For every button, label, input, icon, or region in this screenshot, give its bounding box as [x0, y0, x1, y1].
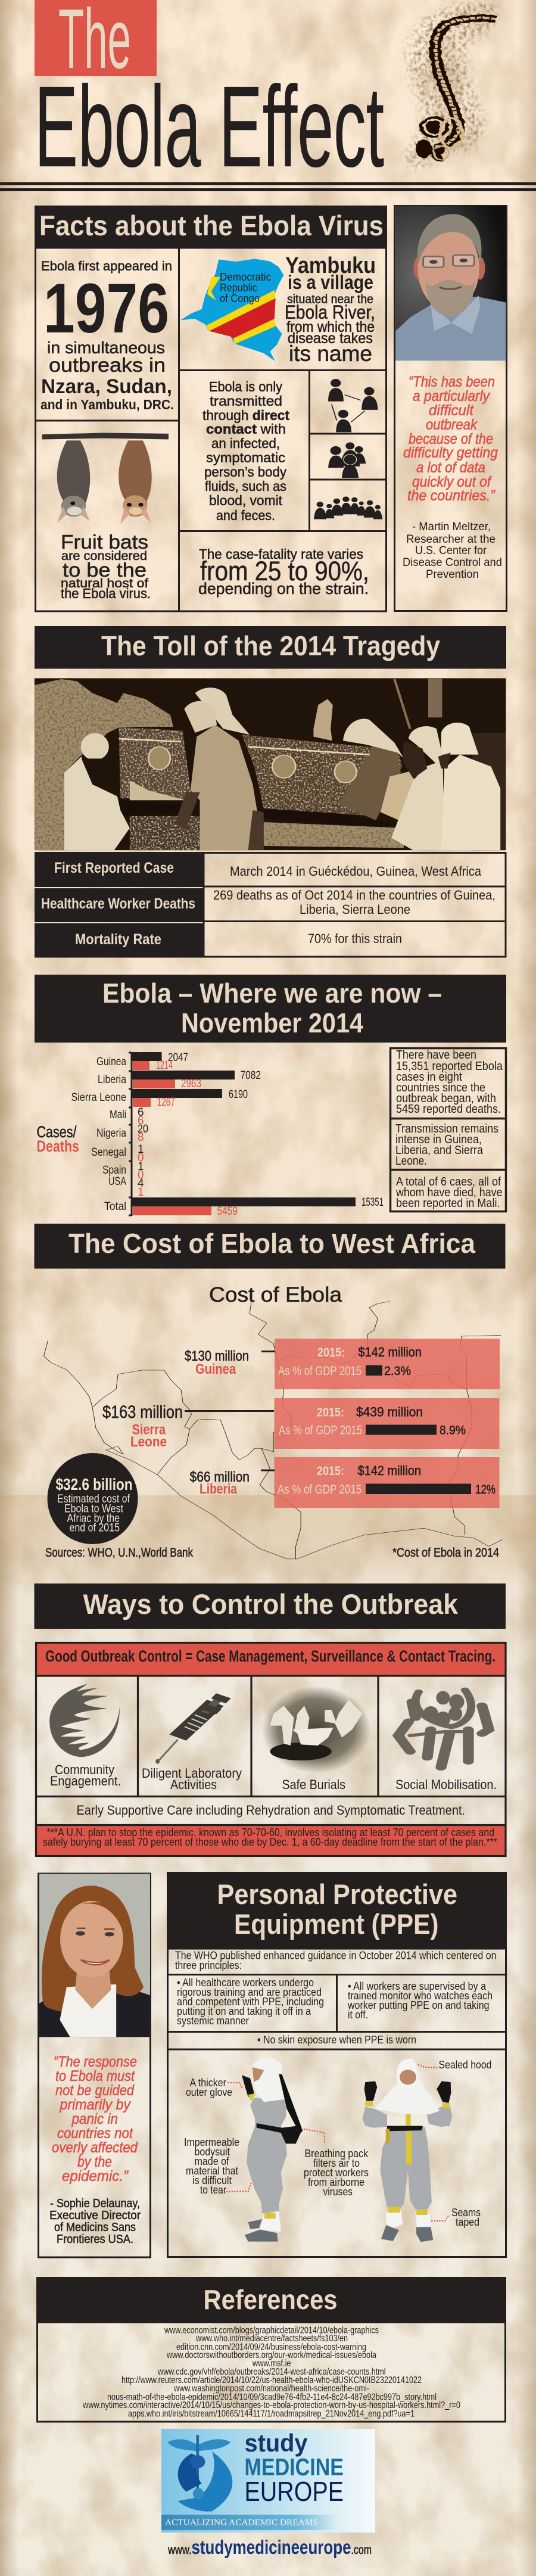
table: toll facts: March 2014 in Guéckédou, Guinea, West Africa [230, 864, 482, 879]
bar chart: cases and deaths by country: 4 [138, 1177, 144, 1190]
heading: ways to control the outbreak [35, 1583, 506, 1629]
bar chart: cases and deaths by country: 8 [138, 1131, 144, 1144]
callout: breathing pack: viruses [323, 2185, 353, 2198]
bar chart: cases and deaths by country: 1267 [157, 1096, 175, 1109]
icon: social mobilisation [395, 1690, 497, 1792]
table: toll facts: Liberia, Sierra Leone [300, 902, 410, 917]
quote text: the countries.” [407, 487, 496, 504]
quote text: countries not [57, 2125, 133, 2142]
panel: Sierra Leone cost: 2015: [317, 1406, 344, 1419]
callouts: outbreak notes: Transmission remains [395, 1122, 498, 1135]
map: West Africa outline [43, 1301, 503, 1559]
quote text: to Ebola must [55, 2068, 135, 2085]
icon: community engagement: Community [55, 1762, 114, 1777]
logo: Study Medicine Europe [161, 2429, 375, 2533]
photo: safe burials [261, 1686, 371, 1792]
text block: fruit bats: natural host of [61, 577, 148, 590]
text block: transmission: fluids, such as [205, 478, 286, 494]
quote text [403, 374, 498, 504]
legend: cases/deaths: Deaths [37, 1137, 79, 1155]
quote attribution: of Medicins Sans [54, 2221, 136, 2234]
title block [35, 0, 384, 191]
panel: Sierra Leone cost: As % of GDP 2015 [279, 1424, 362, 1437]
callout: breathing pack [302, 2129, 369, 2198]
text block: Yambuku: from which the [286, 319, 375, 335]
label: Sierra Leone 2014 cost: Leone [130, 1434, 167, 1450]
text: principle 2: • All workers are supervised by a [348, 1980, 487, 1992]
text block: fatality rate: depending on the strain. [198, 580, 369, 598]
quote text: difficult [429, 402, 474, 419]
heading: toll of the 2014 tragedy [35, 626, 506, 668]
quote text: epidemic.” [62, 2168, 129, 2185]
callout: sealed hood: Sealed hood [438, 2058, 492, 2071]
bar chart: cases and deaths by country: USA [108, 1175, 126, 1188]
text block: transmission: person’s body [204, 464, 286, 480]
text block: 1976: Nzara, Sudan, [41, 375, 172, 398]
callout: seams taped: Seams [451, 2206, 481, 2219]
text block: 1976: Ebola first appeared in [41, 259, 172, 273]
callouts: outbreak notes: 5459 reported deaths. [396, 1103, 501, 1116]
text block: transmission: and feces. [216, 508, 275, 523]
quote text: by the [77, 2154, 112, 2170]
callout: sealed hood [419, 2058, 492, 2071]
bar chart: cases and deaths by country: 1 [138, 1161, 144, 1173]
text block: Yambuku: Ebola River, [285, 301, 375, 323]
heading: toll of the 2014 tragedy: The Toll of the 2014 Tragedy [101, 630, 440, 661]
icon: community engagement: Engagement. [50, 1774, 121, 1788]
text block: fruit bats: to be the [63, 559, 147, 581]
reference list [82, 2326, 460, 2419]
bar chart: cases and deaths by country: Mali [110, 1109, 126, 1121]
bar chart: cases and deaths by country: 1214 [156, 1059, 173, 1072]
text: principle 1: • All healthcare workers undergo [177, 1976, 314, 1989]
text block: transmission: symptomatic [206, 450, 285, 465]
quote attribution: Disease Control and [403, 556, 502, 569]
text: principle 1: rigorous training and are practiced [177, 1986, 322, 1998]
callout: impermeable bodysuit: material that [186, 2164, 238, 2177]
heading: references: References [204, 2284, 337, 2315]
reference list: www.economist.com/blogs/graphicdetail/2014/10/ebola-graphics [164, 2326, 379, 2335]
panel: Liberia cost: 2015: [317, 1464, 344, 1478]
map: Democratic Republic of Congo flag map: Republic [220, 282, 257, 294]
text block: 1976: 1976 [43, 269, 169, 348]
text: principle 2: it off. [348, 2008, 368, 2021]
text: principle 2: trained monitor who watches each [348, 1989, 493, 2002]
icon: syringe, laboratory activities: Diligent Laboratory [142, 1766, 242, 1781]
text block: Yambuku: its name [289, 341, 372, 366]
reference list: www.cdc.gov/vhf/ebola/outbreaks/2014-west-africa/case-counts.html [157, 2367, 386, 2377]
quote attribution [49, 2197, 141, 2246]
callout: breathing pack: filters air to [313, 2157, 360, 2169]
panel: Guinea cost: As % of GDP 2015 [278, 1364, 362, 1378]
bar chart: cases and deaths by country: 7082 [241, 1069, 261, 1082]
text: WHO guidance: three principles: [175, 1959, 242, 1971]
bar chart: cases and deaths by country: 0 [138, 1152, 144, 1164]
text block: fruit bats: are considered [61, 549, 147, 563]
quote text: “The response [54, 2054, 137, 2070]
text: principle 2 [347, 1980, 493, 2021]
quote text: a lot of data [416, 459, 485, 476]
label: Guinea 2014 cost: Guinea [195, 1361, 236, 1377]
legend: cases/deaths: Cases/ [37, 1123, 77, 1141]
text: principle 1: and competent with PPE, including [177, 1995, 324, 2008]
callout: 32.6 billion circle: Estimated cost of [57, 1493, 130, 1505]
bar chart: cases and deaths by country: 1 [138, 1186, 144, 1199]
callouts: outbreak notes: whom have died, have [395, 1186, 503, 1199]
heading: facts: Facts about the Ebola Virus [39, 210, 384, 241]
panel: Sierra Leone cost [274, 1398, 499, 1449]
icon: social mobilisation: Social Mobilisation. [395, 1777, 497, 1792]
callout: 32.6 billion circle: Afriac by the [67, 1512, 120, 1525]
text: early supportive care: Early Supportive Care including Rehydration and Symptomatic Treatment. [76, 1803, 465, 1818]
bar chart: cases and deaths by country: 6 [138, 1115, 144, 1127]
callout: 32.6 billion circle: end of 2015 [69, 1522, 120, 1535]
text: principle 2: worker putting PPE on and taking [347, 1999, 490, 2011]
panel: references [36, 2277, 506, 2422]
callout: impermeable bodysuit: to tear [200, 2183, 226, 2196]
reference list: edition.cnn.com/2014/09/24/business/ebola-cost-warning [176, 2342, 366, 2352]
quote text: because of the [409, 431, 493, 447]
panel: Guinea cost [275, 1339, 500, 1389]
heading: cost to West Africa: The Cost of Ebola to West Africa [68, 1228, 475, 1259]
quote text: not be guided [55, 2082, 135, 2099]
text block: fruit bats: Fruit bats [61, 531, 148, 553]
text block: Yambuku: Yambuku [285, 253, 376, 278]
illustration: front-view worker in PPE [362, 2059, 452, 2242]
text block: 1976: outbreaks in [49, 354, 166, 376]
text block: transmission: through direct [202, 407, 289, 423]
text: WHO guidance [175, 1949, 497, 1971]
text block: fatality rate [198, 546, 369, 598]
panel: Martin Meltzer quote [394, 206, 506, 611]
table: toll facts [35, 852, 506, 958]
quote text: panic in [71, 2111, 118, 2127]
sources note: Sources: WHO, U.N.,World Bank [45, 1546, 193, 1560]
icon: syringe, laboratory activities: Activities [170, 1777, 217, 1792]
reference list: nous-math-of-the-ebola-epidemic/2014/10/09/3cad9e76-4fb2-11e4-8c24-487e92bc997b_story.html [107, 2393, 437, 2402]
label: Guinea 2014 cost: $130 million [185, 1348, 249, 1364]
reference list: www.doctorswithoutborders.org/our-work/medical-issues/ebola [166, 2350, 376, 2360]
text block: fruit bats: the Ebola virus. [61, 586, 151, 601]
label: Sierra Leone 2014 cost [102, 1402, 274, 1450]
text: principle 1: putting it on and taking it off in a [177, 2005, 311, 2017]
text block: Yambuku: is a village [288, 271, 373, 293]
quote attribution: - Martin Meltzer, [412, 521, 491, 533]
quote text: a particularly [413, 388, 490, 405]
quote attribution: U.S. Center for [415, 545, 487, 557]
heading: PPE: Equipment (PPE) [234, 1908, 438, 1940]
quote attribution: Frontieres USA. [57, 2233, 133, 2246]
quote attribution: Researcher at the [406, 533, 496, 546]
bar chart: cases and deaths by country: Total [104, 1200, 126, 1213]
logo: Study Medicine Europe: EUROPE [244, 2476, 344, 2507]
fact grid lines [35, 248, 386, 611]
icon: syringe, laboratory activities [142, 1696, 242, 1792]
text block: Yambuku [285, 253, 376, 366]
callout: 32.6 billion circle: Ebola to West [64, 1502, 124, 1516]
callout: breathing pack: from airborne [308, 2176, 364, 2188]
icon: community engagement [49, 1684, 121, 1788]
label: Guinea 2014 cost [185, 1348, 275, 1377]
illustration: side-view worker in PPE [242, 2058, 303, 2242]
bar chart: cases and deaths by country: 2963 [181, 1078, 201, 1090]
callout: thicker outer glove: A thicker [189, 2076, 226, 2089]
panel: Sierra Leone cost: $439 million [356, 1405, 423, 1419]
bar chart: cases and deaths by country: Spain [102, 1164, 126, 1177]
reference list: www.msf.ie [252, 2359, 291, 2369]
text block: Yambuku: disease takes [288, 330, 373, 347]
text block: transmission: blood, vomit [209, 493, 283, 508]
quote attribution: - Sophie Delaunay, [50, 2197, 140, 2210]
text block: transmission: transmitted [210, 393, 282, 409]
website address: .com [351, 2543, 372, 2557]
quote text: primarily by [60, 2096, 131, 2113]
callouts: outbreak notes [390, 1049, 506, 1212]
bar chart: cases and deaths by country: 5459 [217, 1205, 238, 1218]
heading: where we are now: Ebola – Where we are now – [102, 978, 442, 1009]
website address: www. [167, 2543, 192, 2557]
panel: outbreak control [36, 1643, 506, 1856]
photo: medical team with isolation capsule [35, 678, 506, 850]
photo: safe burials: Safe Burials [282, 1777, 345, 1792]
quote text [52, 2054, 138, 2185]
reference list: apps.who.int/iris/bitstream/10665/144117/1/roadmapsitrep_21Nov2014_eng.pdf?ua=1 [128, 2409, 415, 2419]
photo: Martin Meltzer [395, 206, 506, 360]
logo: Study Medicine Europe: study [244, 2429, 308, 2457]
callout: impermeable bodysuit: is difficult [192, 2174, 232, 2186]
text block: transmission [202, 379, 289, 523]
panel: Guinea cost: $142 million [359, 1345, 422, 1359]
text: principle 1 [177, 1976, 324, 2027]
callout: thicker outer glove [186, 2076, 242, 2098]
map: Democratic Republic of Congo flag map: of Congo [220, 293, 260, 304]
callouts: outbreak notes: been reported in Mali. [396, 1197, 500, 1210]
reference list: www.washingtonpost.com/national/health-science/the-omi- [173, 2384, 369, 2394]
quote text: difficulty getting [403, 444, 498, 461]
heading: PPE: Personal Protective [217, 1878, 457, 1910]
text block: transmission: Ebola is only [209, 379, 282, 394]
legend: cases/deaths [37, 1123, 79, 1155]
callouts: outbreak notes: cases in eight [396, 1071, 462, 1084]
table: toll facts: Healthcare Worker Deaths [41, 895, 195, 912]
heading: where we are now: November 2014 [181, 1007, 363, 1038]
label: Liberia 2014 cost: $66 million [189, 1469, 250, 1485]
bar chart: cases and deaths by country: Senegal [91, 1146, 126, 1159]
callout: 32.6 billion circle [48, 1453, 138, 1544]
bar chart: cases and deaths by country: Liberia [98, 1074, 126, 1086]
callout: 32.6 billion circle: $32.6 billion [56, 1475, 132, 1494]
heading: PPE [167, 1872, 507, 1949]
bar chart: cases and deaths by country: 6 [138, 1106, 144, 1119]
label: Liberia 2014 cost: Liberia [200, 1481, 238, 1497]
text block: fruit bats [61, 531, 151, 601]
quote attribution: Executive Director [49, 2209, 141, 2222]
bar chart: cases and deaths by country: 20 [138, 1123, 148, 1135]
bar chart: cases and deaths by country: 2047 [168, 1051, 188, 1064]
red banner: UN plan [36, 1826, 506, 1855]
bar chart: cases and deaths by country: 15351 [362, 1196, 384, 1209]
heading: where we are now [35, 975, 506, 1043]
callouts: outbreak notes: intense in Guinea, [395, 1133, 482, 1146]
red banner: good outbreak control [36, 1644, 506, 1675]
icon: three connected people [328, 379, 378, 433]
callout: breathing pack: Breathing pack [305, 2147, 369, 2160]
text block: fatality rate: from 25 to 90%, [200, 556, 369, 586]
callouts: outbreak notes: Liberia, and Sierra [395, 1144, 484, 1157]
label: Sierra Leone 2014 cost: $163 million [102, 1402, 183, 1422]
table: toll facts: 70% for this strain [308, 931, 402, 946]
heading: references [36, 2277, 506, 2322]
reference list: www.who.int/mediacentre/factsheets/fs103/en [195, 2334, 348, 2344]
bar chart: cases and deaths by country: Guinea [96, 1056, 126, 1068]
panel: Sierra Leone cost: 8.9% [440, 1424, 466, 1437]
callout: impermeable bodysuit: made of [194, 2155, 229, 2167]
icon: fruit bats [42, 433, 169, 524]
bar chart: cases and deaths by country: 1 [138, 1143, 144, 1156]
callout: breathing pack: protect workers [304, 2166, 369, 2179]
quote text: quickly out of [412, 474, 493, 490]
double rule [0, 182, 536, 191]
icon: crowd [314, 496, 382, 519]
heading: cost to West Africa [35, 1224, 505, 1269]
chart title: cost of Ebola: Cost of Ebola [209, 1283, 342, 1306]
map: Democratic Republic of Congo flag map [180, 259, 283, 361]
text block: transmission: an infected, [211, 435, 280, 451]
text block: transmission: contact with [206, 421, 286, 437]
table: toll facts: Mortality Rate [75, 931, 161, 948]
callout: thicker outer glove: outer glove [186, 2086, 232, 2098]
icon: caduceus and globe [167, 2435, 232, 2512]
label: Liberia 2014 cost [189, 1469, 275, 1497]
callouts: outbreak notes: A total of 6 caes, all of [396, 1175, 501, 1189]
panel: Liberia cost [274, 1457, 499, 1508]
quote attribution: Prevention [426, 568, 479, 581]
website address: studymedicineeurope [192, 2536, 351, 2558]
bar chart: cases and deaths by country: 6190 [229, 1088, 248, 1101]
callouts: outbreak notes: 15,351 reported Ebola [396, 1060, 503, 1073]
text block: 1976: and in Yambuku, DRC. [40, 397, 174, 412]
callouts: outbreak notes: Leone. [395, 1155, 427, 1168]
heading: ways to control the outbreak: Ways to Control the Outbreak [83, 1588, 459, 1620]
quote attribution [403, 521, 502, 581]
footnote: *Cost of Ebola in 2014 [392, 1546, 499, 1560]
map: Democratic Republic of Congo flag map: Democratic [220, 271, 271, 283]
panel: Liberia cost: $142 million [357, 1463, 421, 1478]
panel: Sophie Delaunay quote [38, 1874, 150, 2257]
panel: Liberia cost: 12% [475, 1483, 496, 1497]
callout: seams taped [432, 2206, 481, 2228]
reference list: http://www.reuters.com/article/2014/10/22/us-health-ebola-who-idUSKCN0IB23220141022 [121, 2375, 422, 2385]
text: principle 3: • No skin exposure when PPE is worn [257, 2033, 416, 2046]
panel: personal protective equipment [167, 1872, 507, 2257]
quote text: overly affected [52, 2139, 138, 2156]
panel: Guinea cost: 2015: [317, 1346, 345, 1359]
text: principle 1: systemic manner [177, 2014, 249, 2027]
panel: Guinea cost: 2.3% [384, 1364, 411, 1378]
bar chart: cases and deaths by country: 0 [138, 1169, 144, 1181]
bar chart: cases and deaths by country: Nigeria [96, 1127, 126, 1140]
callout: impermeable bodysuit [184, 2136, 251, 2196]
text block: 1976 [40, 259, 174, 412]
text block: 1976: in simultaneous [47, 338, 165, 357]
callout: impermeable bodysuit: Impermeable [184, 2136, 239, 2148]
panel: Liberia cost: As % of GDP 2015 [278, 1483, 362, 1497]
text block: Yambuku: situated near the [287, 293, 373, 306]
callout: seams taped: taped [456, 2216, 479, 2228]
logo: Study Medicine Europe: ACTUALIZING ACADEMIC DREAMS [165, 2518, 318, 2527]
text block: fatality rate: The case-fatality rate varies [199, 546, 363, 562]
bar chart: cases and deaths by country: Sierra Leone [71, 1091, 126, 1104]
table: toll facts: First Reported Case [54, 860, 174, 876]
callouts: outbreak notes: There have been [396, 1049, 476, 1062]
icon: small group [328, 443, 366, 478]
callouts: outbreak notes: countries since the [396, 1081, 485, 1094]
photo: Sophie Delaunay [39, 1874, 150, 2037]
bar chart: cases and deaths by country [37, 1051, 384, 1218]
table: toll facts: 269 deaths as of Oct 2014 in the countries of Guinea, [213, 888, 496, 903]
logo: Study Medicine Europe: MEDICINE [244, 2453, 344, 2481]
panel: facts about the Ebola virus [35, 206, 387, 611]
icon: ebola virus filament [415, 18, 496, 160]
quote text: outbreak [426, 416, 478, 433]
callout: impermeable bodysuit: bodysuit [194, 2145, 230, 2158]
label: Sierra Leone 2014 cost: Sierra [132, 1421, 166, 1438]
callouts: outbreak notes: outbreak began, with [396, 1092, 496, 1105]
quote text: “This has been [409, 374, 495, 390]
